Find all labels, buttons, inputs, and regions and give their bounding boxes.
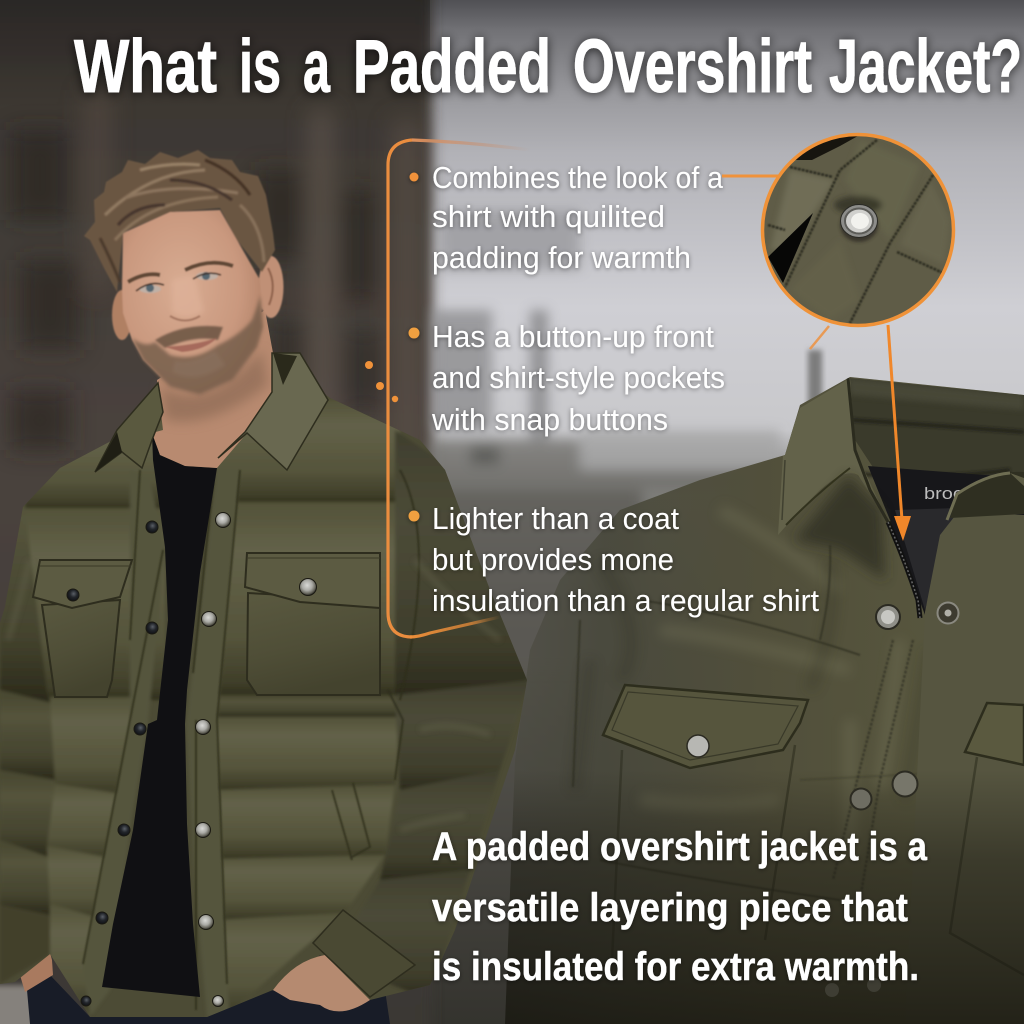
- eyes: [128, 263, 233, 293]
- face: [122, 210, 263, 395]
- man's snap buttons: [67, 512, 316, 1006]
- summary statement: is insulated for extra warmth.: [432, 945, 919, 989]
- pocket left: [33, 560, 132, 697]
- arrow from circle to jacket collar: [888, 325, 911, 541]
- nose: [172, 275, 204, 317]
- man wearing jacket: [0, 150, 530, 1024]
- jacket body: [0, 353, 527, 1017]
- zipper: [888, 522, 920, 618]
- title: What: [74, 24, 217, 108]
- pocket flap: [603, 685, 808, 768]
- bullet 1: padding for warmth: [432, 240, 691, 275]
- pocket right: [245, 553, 380, 695]
- stitching lines: [83, 470, 419, 1010]
- bullet 1: [410, 160, 724, 275]
- quilted panels of the jacket: [0, 400, 530, 1017]
- bullet 2: with snap buttons: [431, 402, 668, 437]
- hand right: [273, 955, 370, 1011]
- title: Padded: [353, 24, 551, 108]
- head and neck: [84, 150, 328, 472]
- title: [74, 24, 1022, 108]
- chest left puffs: [23, 420, 170, 508]
- bullet 2: Has a button-up front: [432, 319, 714, 354]
- bullet 3: but provides mone: [432, 542, 674, 577]
- right cuff: [313, 910, 415, 997]
- right pocket: [965, 703, 1024, 765]
- light streaks on sleeve: [8, 560, 500, 830]
- soft fabric folds on closeup: [645, 510, 900, 808]
- closeup jacket on the right: [500, 370, 1024, 1024]
- collar left: [95, 383, 163, 472]
- ear right: [258, 256, 284, 318]
- closeup snap buttons: [687, 602, 958, 997]
- neck: [152, 310, 283, 468]
- collar right: [218, 353, 328, 470]
- collar flap: [778, 378, 888, 535]
- bullet 3: Lighter than a coat: [432, 501, 679, 536]
- jeans: [27, 975, 390, 1024]
- placket strips: [186, 468, 240, 1017]
- snap button: [840, 204, 878, 242]
- placket stitching: [832, 640, 914, 889]
- summary statement: versatile layering piece that: [432, 886, 908, 930]
- bullet 2: [408, 319, 725, 437]
- title: is: [239, 24, 281, 108]
- left sleeve puffs: [0, 510, 50, 702]
- dark inner shirt and label: [868, 466, 1024, 615]
- inner quilted collar: [848, 378, 1024, 484]
- right front panel: [915, 514, 1024, 958]
- black t-shirt: [102, 433, 217, 997]
- label: brand tag: brooc: [924, 484, 975, 503]
- bullet 1: shirt with quilited: [432, 199, 665, 234]
- summary statement: A padded overshirt jacket is a: [432, 825, 928, 869]
- summary statement: [432, 825, 928, 989]
- hand left: [17, 945, 53, 992]
- bullet 3: insulation than a regular shirt: [432, 583, 819, 618]
- right arm puffs: [395, 430, 530, 695]
- connector from circle to chimney: [810, 326, 829, 349]
- bullet 3: [408, 501, 819, 618]
- detail circle: snap button close-up: [760, 130, 960, 330]
- title: a: [303, 24, 331, 108]
- hair: [84, 150, 275, 292]
- quilting on closeup: [572, 546, 916, 900]
- ear left: [112, 290, 132, 340]
- decorative orange dots: [365, 361, 398, 402]
- chest right puffs: [215, 400, 400, 502]
- bracket around bullet list: [388, 140, 530, 637]
- beard stubble: [132, 295, 263, 395]
- bullet 1: Combines the look of a: [432, 160, 724, 195]
- title: Overshirt: [573, 24, 812, 108]
- bullet 2: and shirt-style pockets: [432, 360, 725, 395]
- connector from first bullet to detail circle: [722, 174, 778, 178]
- mouth: [165, 338, 217, 352]
